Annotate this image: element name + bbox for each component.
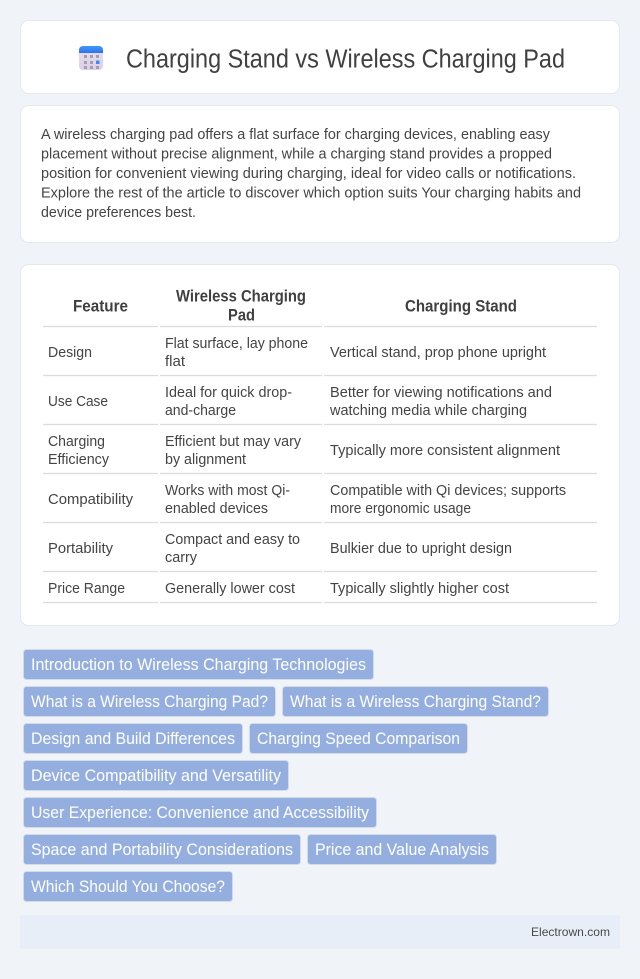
- tag: wireless stand: What is a Wireless Charging Stand?: [290, 693, 541, 711]
- row: charging efficiency: by alignment: [165, 452, 246, 468]
- table header: Feature: [73, 298, 128, 316]
- footer brand: Electrown.com: [531, 925, 610, 939]
- row: compatibility: [48, 483, 566, 517]
- tag: compatibility: [24, 760, 288, 790]
- table header: Charging Stand: [405, 298, 517, 316]
- row: charging efficiency: [48, 434, 560, 468]
- header panel: [20, 20, 620, 94]
- row: compatibility: Compatibility: [48, 492, 134, 508]
- tag: price: [308, 834, 496, 864]
- tag: price: Price and Value Analysis: [315, 841, 489, 859]
- intro text: position for convenient viewing during charging, ideal for video calls or notifications.: [41, 166, 576, 182]
- tag: speed: Charging Speed Comparison: [257, 730, 460, 748]
- row: compatibility: Compatible with Qi devices; supports: [330, 483, 566, 499]
- tag: introduction: Introduction to Wireless Charging Technologies: [31, 656, 366, 674]
- footer: [20, 915, 620, 949]
- intro text: Explore the rest of the article to discover which option suits Your charging habits and: [41, 186, 581, 202]
- table header: [73, 288, 517, 324]
- row: charging efficiency: Charging: [48, 434, 105, 450]
- comparison table panel: [20, 264, 620, 626]
- tag: speed: [250, 724, 468, 754]
- intro text: device preferences best.: [41, 205, 196, 221]
- row: portability: carry: [165, 550, 198, 566]
- row: compatibility: Works with most Qi-: [165, 483, 290, 499]
- row: portability: Compact and easy to: [165, 532, 300, 548]
- row: use case: [48, 385, 552, 419]
- row: design: Design: [48, 345, 92, 361]
- tag: introduction: [24, 650, 374, 680]
- table header: Wireless Charging: [176, 288, 306, 306]
- intro text: A wireless charging pad offers a flat surface for charging devices, enabling easy: [41, 127, 551, 143]
- row: use case: watching media while charging: [329, 403, 527, 419]
- row: portability: [48, 532, 512, 566]
- row: portability: Bulkier due to upright design: [330, 541, 512, 557]
- row: use case: Better for viewing notifications and: [330, 385, 552, 401]
- row: price range: Generally lower cost: [165, 581, 295, 597]
- title: Charging Stand vs Wireless Charging Pad: [126, 46, 565, 74]
- tag: choose: [24, 872, 232, 902]
- row: design: [48, 336, 546, 370]
- row: design: Flat surface, lay phone: [165, 336, 308, 352]
- tag: design: [24, 724, 242, 754]
- tag: user experience: [24, 798, 376, 828]
- tag: user experience: User Experience: Convenience and Accessibility: [31, 804, 370, 822]
- row: charging efficiency: Typically more consistent alignment: [330, 443, 560, 459]
- tag: space: Space and Portability Considerations: [31, 841, 293, 859]
- row: use case: and-charge: [165, 403, 236, 419]
- row: design: flat: [165, 354, 185, 370]
- row: price range: [48, 581, 509, 597]
- intro panel: [20, 106, 620, 242]
- topic tags: [24, 650, 548, 902]
- tag: wireless pad: [24, 686, 276, 716]
- tag: wireless stand: [282, 686, 548, 716]
- row: use case: Use Case: [48, 394, 108, 410]
- row: use case: Ideal for quick drop-: [165, 385, 292, 401]
- table header: Pad: [228, 306, 255, 324]
- tag: compatibility: Device Compatibility and Versatility: [31, 767, 282, 785]
- tag: wireless pad: What is a Wireless Charging Pad?: [31, 693, 268, 711]
- row: charging efficiency: Efficiency: [48, 452, 110, 468]
- row: compatibility: more ergonomic usage: [330, 501, 471, 517]
- row: compatibility: enabled devices: [165, 501, 268, 517]
- tag: space: [24, 834, 300, 864]
- icon: calendar: [79, 46, 103, 70]
- intro text: placement without precise alignment, while a charging stand provides a propped: [41, 146, 552, 162]
- tag: choose: Which Should You Choose?: [31, 878, 225, 896]
- intro text: [41, 127, 581, 221]
- row: charging efficiency: Efficient but may vary: [165, 434, 302, 450]
- row: price range: Typically slightly higher cost: [330, 581, 509, 597]
- row: design: Vertical stand, prop phone upright: [330, 345, 546, 361]
- row: price range: Price Range: [48, 581, 125, 597]
- tag: design: Design and Build Differences: [31, 730, 235, 748]
- row: portability: Portability: [48, 541, 114, 557]
